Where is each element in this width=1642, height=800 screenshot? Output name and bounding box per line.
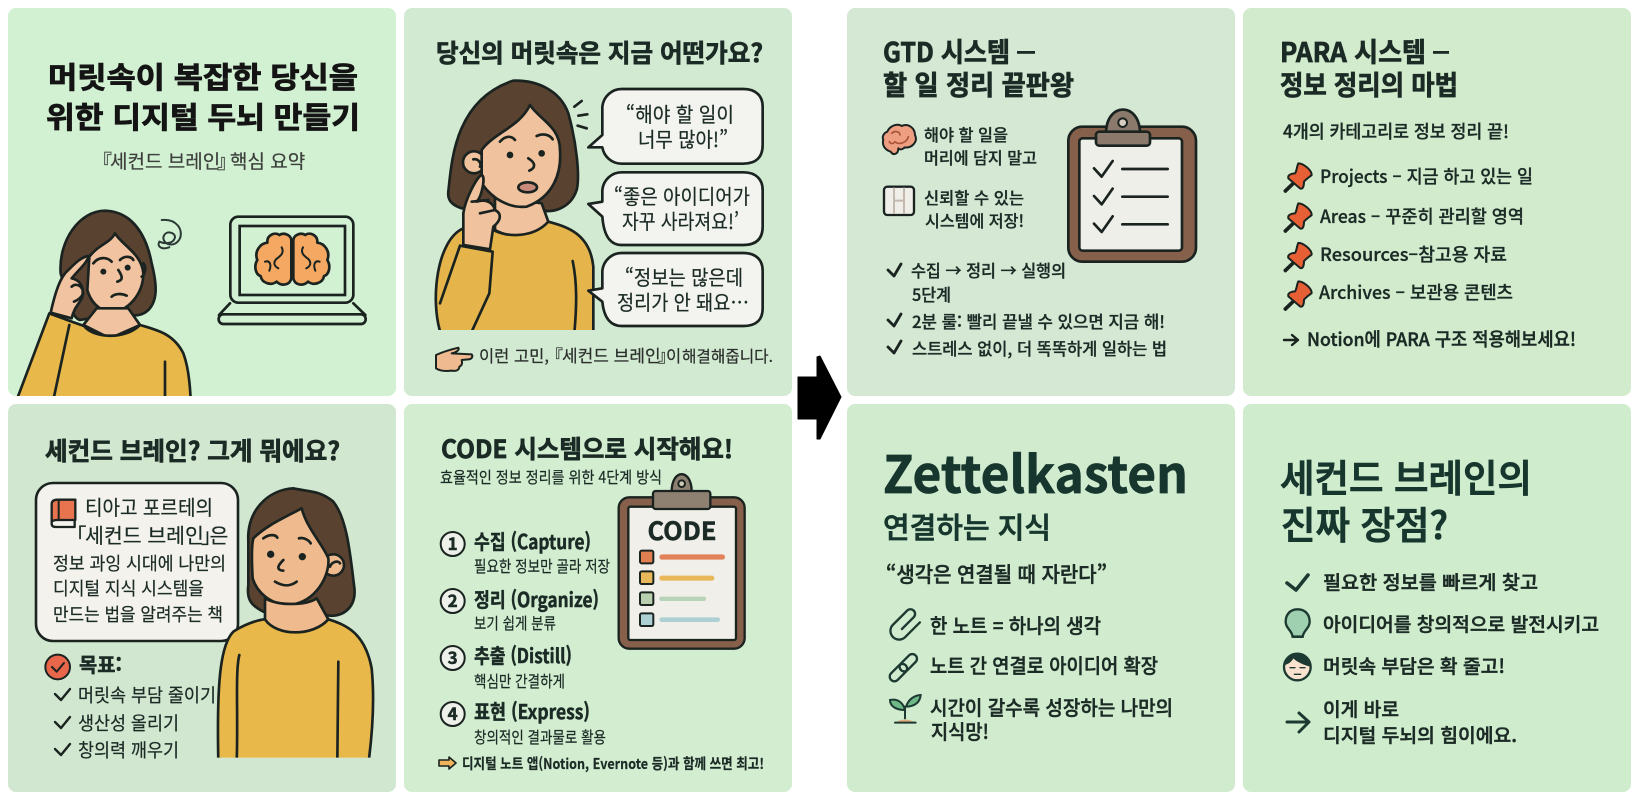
caption: 이런 고민,: [479, 343, 549, 367]
goal list: 머릿속 부담 줄이기: [78, 681, 216, 708]
text: storage point: [924, 185, 1024, 232]
heading: 정보 정리의 마법: [1280, 64, 1458, 103]
panel: benefits: [1243, 404, 1631, 792]
step 4: 창의적인 결과물로 활용: [474, 724, 606, 748]
icon: clipboard CODE: [619, 474, 745, 649]
speech bubble 1: 너무 많아!”: [638, 123, 728, 153]
description box: 정보 과잉 시대에 나만의: [53, 550, 226, 576]
title: 머릿속이 복잡한 당신을: [48, 55, 358, 97]
subheading: 효율적인 정보 정리를 위한 4단계 방식: [440, 464, 662, 488]
item: growth: 시간이 갈수록 성장하는 나만의: [930, 692, 1173, 721]
step 2: 2: [448, 587, 458, 612]
item: ideas: 아이디어를 창의적으로 발전시키고: [1323, 610, 1599, 637]
quote: “생각은 연결될 때 자란다”: [886, 559, 1107, 589]
title: 위한 디지털 두뇌 만들기: [46, 95, 360, 137]
description box: 디지털 지식 시스템을: [53, 575, 204, 601]
subtitle: 』: [217, 147, 236, 174]
text: brain point: [924, 122, 1037, 169]
icon: arrow: [1284, 335, 1298, 345]
description box: 티아고 포르테의: [85, 491, 213, 521]
text: brain point: 머리에 담지 말고: [924, 145, 1037, 169]
illustration: thinking woman: [17, 211, 191, 400]
description box: 세컨드 브레인: [85, 519, 204, 549]
step 2: 보기 쉽게 분류: [474, 610, 556, 634]
panel: CODE system: [404, 404, 792, 792]
icon: sprout: [890, 695, 921, 723]
icon: goal check: [45, 655, 70, 679]
goal list: [45, 649, 216, 763]
illustration: worried woman: [436, 81, 593, 333]
checklist: 스트레스 없이, 더 똑똑하게 일하는 법: [912, 336, 1167, 360]
heading: 세컨드 브레인의: [1280, 448, 1532, 503]
step 4: 표현 (Express): [474, 696, 590, 725]
checklist: 수집 → 정리 → 실행의: [911, 258, 1066, 282]
heading: 진짜 장점?: [1281, 495, 1448, 550]
icon: check: [1287, 575, 1308, 590]
speech bubble 2: “좋은 아이디어가: [614, 180, 750, 210]
speech bubble 2: [588, 172, 763, 245]
text: brain point: 해야 할 일을: [924, 122, 1008, 146]
heading: 당신의 머릿속은 지금 어떤가요?: [436, 34, 763, 70]
step 3: 추출 (Distill): [474, 640, 572, 669]
subtitle: 『: [93, 147, 112, 174]
speech bubble 1: “해야 할 일이: [626, 98, 734, 128]
description box: [36, 483, 238, 641]
item: resources: Resources–참고용 자료: [1320, 241, 1507, 267]
step 4: [441, 696, 606, 748]
icon: book: [52, 500, 75, 527]
heading: Zettelkasten: [883, 434, 1188, 508]
goal list: 생산성 올리기: [78, 709, 179, 736]
subtitle: 핵심 요약: [230, 147, 305, 174]
subtitle: 세컨드 브레인: [110, 147, 220, 174]
speech bubble 2: 자꾸 사라져요!’: [622, 205, 739, 235]
step 3: 핵심만 간결하게: [474, 668, 565, 692]
step 2: [441, 584, 599, 634]
step 2: 정리 (Organize): [474, 584, 599, 613]
caption: 『: [546, 342, 563, 367]
step 1: 수집 (Capture): [474, 526, 591, 555]
heading: [1280, 31, 1458, 103]
closing message: 디지털 두뇌의 힘이에요.: [1323, 721, 1517, 748]
heading: [1280, 448, 1532, 550]
caption: 해결해줍니다.: [682, 344, 773, 367]
step 3: 3: [448, 644, 458, 669]
checklist: 2분 룰: 빨리 끝낼 수 있으면 지금 해!: [912, 309, 1165, 333]
text: storage point: 신뢰할 수 있는: [924, 185, 1024, 209]
subheading: 4개의 카테고리로 정보 정리 끝!: [1283, 118, 1509, 144]
icon: pointing hand: [436, 348, 472, 371]
item: archives: Archives – 보관용 콘텐츠: [1319, 279, 1513, 305]
caption: 세컨드 브레인: [562, 342, 661, 367]
item: areas: Areas – 꾸준히 관리할 영역: [1320, 203, 1524, 229]
item: growth: [930, 692, 1173, 745]
panel: Zettelkasten: [847, 404, 1235, 792]
checklist: 5단계: [912, 282, 951, 306]
panel: GTD system: [847, 8, 1235, 396]
icon: brain: [883, 125, 916, 154]
closing message: 이게 바로: [1323, 695, 1399, 722]
icon: link: [888, 652, 919, 683]
heading: GTD 시스템: [883, 31, 1010, 70]
heading: PARA 시스템: [1280, 31, 1426, 70]
icon: clipboard CODE: CODE: [648, 512, 716, 548]
description box: 」: [201, 519, 222, 549]
icon: paperclip: [887, 607, 923, 643]
closing message: [1323, 695, 1517, 748]
item: one note: 한 노트 = 하나의 생각: [930, 610, 1101, 639]
icon: calm face: [1284, 653, 1311, 680]
checklist: [888, 258, 1167, 360]
speech bubble 1: [588, 89, 763, 164]
illustration: smiling woman: [218, 488, 373, 762]
step 1: [441, 526, 610, 577]
description box: 「: [66, 519, 86, 549]
call to action: Notion에 PARA 구조 적용해보세요!: [1307, 326, 1576, 352]
icon: laptop with brain: [219, 217, 366, 324]
panel: PARA system: [1243, 8, 1631, 396]
icon: clipboard checklist: [1068, 110, 1196, 262]
speech bubble 3: [588, 253, 763, 326]
heading: CODE 시스템으로 시작해요!: [441, 430, 733, 466]
icon: swirl: [159, 220, 181, 248]
speech bubble 3: “정보는 많은데: [625, 261, 743, 291]
item: growth: 지식망!: [931, 716, 989, 745]
step 1: 필요한 정보만 골라 저장: [474, 553, 610, 577]
footer tip: 디지털 노트 앱(Notion, Evernote 등)과 함께 쓰면 최고!: [462, 753, 764, 774]
heading: [883, 31, 1074, 103]
icon: arrow: [1287, 713, 1309, 732]
panel: what is second brain: [8, 404, 396, 792]
caption: 이: [666, 343, 681, 367]
item: projects: Projects – 지금 하고 있는 일: [1320, 163, 1533, 189]
panel: what is in your head: [404, 8, 792, 396]
icon: orange arrow: [439, 757, 456, 769]
description box: 만드는 법을 알려주는 책: [53, 601, 223, 627]
step 4: 4: [448, 700, 458, 725]
goal list: 목표:: [79, 649, 122, 678]
step 3: [441, 640, 572, 692]
description box: 은: [210, 519, 228, 549]
subheading: 연결하는 지식: [883, 505, 1051, 547]
item: find fast: 필요한 정보를 빠르게 찾고: [1323, 568, 1538, 595]
caption: 』: [658, 342, 675, 367]
arrow: big black: [798, 356, 841, 439]
text: storage point: 시스템에 저장!: [925, 208, 1024, 232]
heading: 세컨드 브레인? 그게 뭐에요?: [45, 432, 340, 468]
icon: storage box: [884, 187, 914, 215]
icon: bulb: [1286, 609, 1310, 637]
heading: 할 일 정리 끝판왕: [883, 64, 1074, 103]
item: relief: 머릿속 부담은 확 줄고!: [1323, 652, 1505, 679]
step 1: 1: [448, 530, 458, 555]
item: links: 노트 간 연결로 아이디어 확장: [930, 650, 1158, 679]
title: [46, 55, 360, 137]
goal list: 창의력 깨우기: [78, 736, 179, 763]
speech bubble 3: 정리가 안 돼요…: [617, 286, 749, 316]
panel: intro cover: [8, 8, 396, 400]
